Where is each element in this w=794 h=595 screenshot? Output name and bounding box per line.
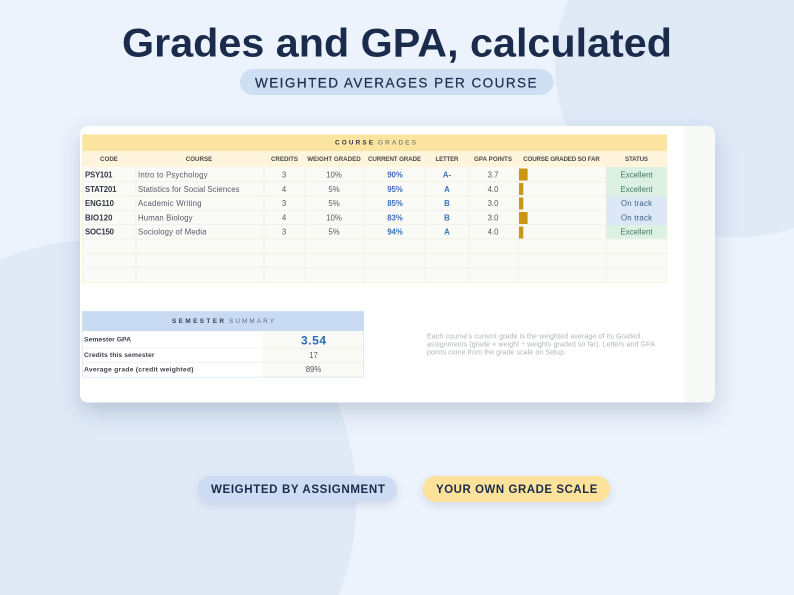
panel: semester summary xyxy=(82,311,364,377)
panel: spreadsheet card xyxy=(80,126,715,402)
row: ENG110: 3.0 xyxy=(488,199,499,208)
row: SOC150: Excellent xyxy=(620,228,653,237)
row: BIO120: On track xyxy=(621,213,652,222)
row: STAT201: STAT201 xyxy=(85,185,117,194)
row: STAT201 xyxy=(85,183,653,195)
column headers xyxy=(100,156,648,163)
row: BIO120: Human Biology xyxy=(138,213,193,222)
row: SOC150: 94% xyxy=(387,228,403,237)
subtitle pill xyxy=(240,69,554,95)
column headers: CODE xyxy=(100,156,118,163)
metric: average grade: 89% xyxy=(306,365,321,374)
table heading: COURSE xyxy=(335,140,374,146)
row: ENG110: Academic Writing xyxy=(138,199,202,208)
column headers: WEIGHT GRADED xyxy=(307,156,361,163)
subtitle pill: WEIGHTED AVERAGES PER COURSE xyxy=(255,74,538,90)
row: PSY101: 3.7 xyxy=(488,170,498,179)
column headers: CREDITS xyxy=(271,156,298,163)
column headers: COURSE GRADED SO FAR xyxy=(523,156,600,163)
column headers: CURRENT GRADE xyxy=(368,156,421,163)
row: STAT201: 5% xyxy=(328,185,340,194)
metric: credits: Credits this semester xyxy=(84,352,155,359)
text block: explanatory note: Each course's current grade is the weighted average of its Graded xyxy=(427,334,640,340)
row: PSY101: A- xyxy=(443,170,452,179)
row: SOC150: 4.0 xyxy=(488,228,499,237)
column headers: LETTER xyxy=(436,156,459,163)
row: STAT201: 95% xyxy=(387,185,403,194)
row: PSY101 xyxy=(85,168,653,180)
row: SOC150: SOC150 xyxy=(85,228,115,237)
row: SOC150: 5% xyxy=(328,228,340,237)
column headers: STATUS xyxy=(625,156,648,163)
row: ENG110: ENG110 xyxy=(85,199,115,208)
badge: your own grade scale: YOUR OWN GRADE SCALE xyxy=(436,484,598,496)
metric: semester GPA: 3.54 xyxy=(301,333,326,347)
row: BIO120: 83% xyxy=(387,213,403,222)
row: BIO120: BIO120 xyxy=(85,213,113,222)
row: ENG110: B xyxy=(444,199,450,208)
row: ENG110: On track xyxy=(621,199,652,208)
summary heading: SUMMARY xyxy=(229,318,275,325)
metric: credits xyxy=(84,351,318,360)
table heading xyxy=(335,140,416,146)
row: ENG110: 3 xyxy=(282,199,286,208)
row: PSY101: Intro to Psychology xyxy=(138,170,208,179)
row: PSY101: PSY101 xyxy=(85,170,113,179)
row: BIO120: B xyxy=(444,213,450,222)
row: SOC150: 3 xyxy=(282,228,286,237)
row: BIO120: 4 xyxy=(282,213,287,222)
metric: semester GPA: Semester GPA xyxy=(84,336,131,344)
row: ENG110: 5% xyxy=(328,199,340,208)
panel: course grades table xyxy=(82,134,667,282)
metric: average grade: Average grade (credit weighted) xyxy=(84,366,194,374)
metric: average grade xyxy=(84,365,321,374)
column headers: GPA POINTS xyxy=(474,156,512,163)
summary heading: SEMESTER xyxy=(172,318,224,325)
row: PSY101: 90% xyxy=(387,170,403,179)
row: SOC150: Sociology of Media xyxy=(138,228,207,237)
row: STAT201: A xyxy=(444,185,450,194)
row: BIO120: 10% xyxy=(326,213,342,222)
row: SOC150: A xyxy=(444,228,450,237)
badge: your own grade scale xyxy=(423,476,610,502)
row: PSY101: 3 xyxy=(282,170,286,179)
row: ENG110 xyxy=(85,198,652,210)
row: STAT201: Statistics for Social Sciences xyxy=(138,185,240,194)
row: BIO120 xyxy=(85,212,652,224)
summary heading xyxy=(172,318,275,325)
table heading: GRADES xyxy=(378,140,416,146)
row: ENG110: 85% xyxy=(387,199,403,208)
title: Grades and GPA, calculated xyxy=(122,22,672,66)
row: STAT201: Excellent xyxy=(620,185,653,194)
text block: explanatory note xyxy=(427,334,655,356)
badge: weighted by assignment: WEIGHTED BY ASSIGNMENT xyxy=(211,484,386,496)
status cells xyxy=(606,167,667,239)
row: BIO120: 3.0 xyxy=(488,213,499,222)
row: SOC150 xyxy=(85,226,653,238)
column headers: COURSE xyxy=(186,156,212,163)
row: PSY101: 10% xyxy=(326,170,342,179)
row: STAT201: 4 xyxy=(282,185,287,194)
row: STAT201: 4.0 xyxy=(488,185,499,194)
metric: credits: 17 xyxy=(309,351,318,360)
row: PSY101: Excellent xyxy=(620,170,653,179)
text block: explanatory note: assignments (grade × weight ÷ weights graded so far). Letters and GPA xyxy=(427,342,655,348)
badge: weighted by assignment xyxy=(198,476,397,502)
text block: explanatory note: points come from the grade scale on Setup. xyxy=(427,350,566,356)
metric: semester GPA xyxy=(84,333,326,347)
